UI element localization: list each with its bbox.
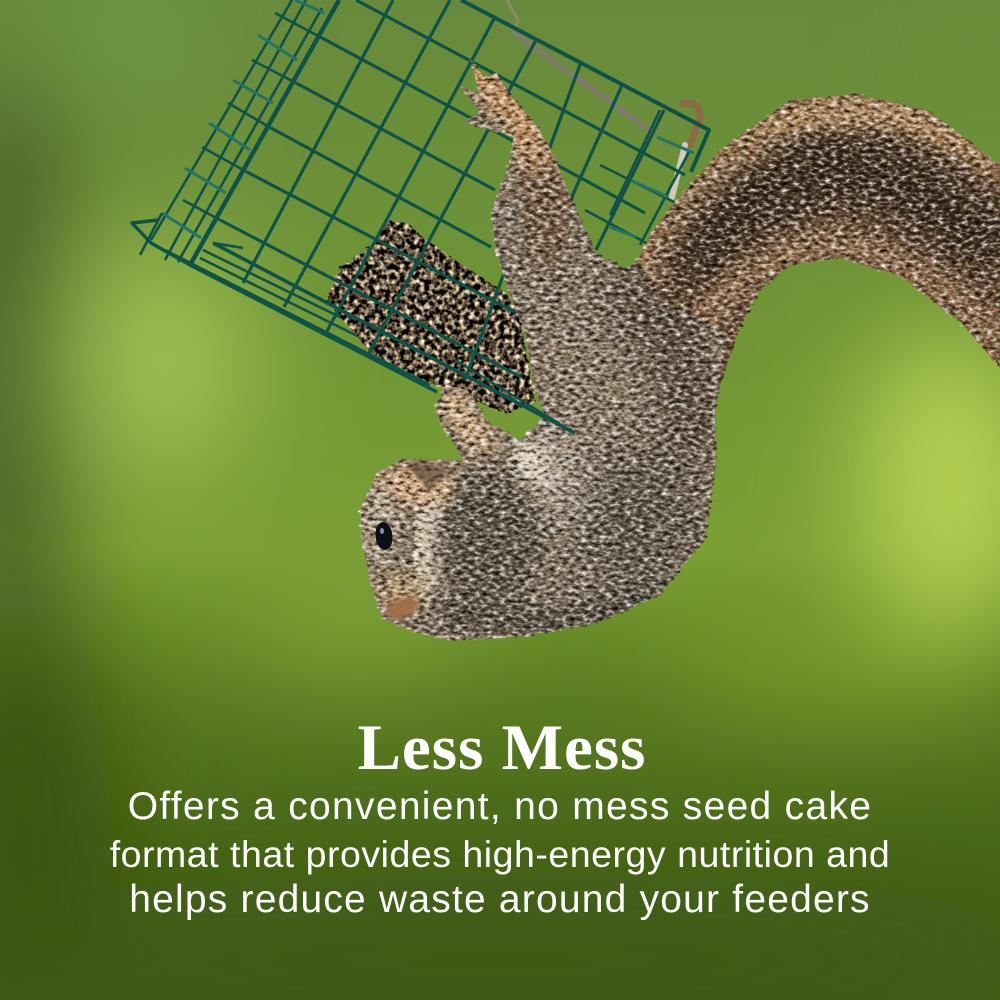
chain and hanger: [507, 0, 700, 197]
seed cake: [326, 220, 536, 413]
front wire grid: [220, 0, 685, 380]
title: Less Mess: [358, 712, 646, 784]
description text: Offers a convenient, no mess seed cake: [128, 785, 872, 828]
nose: [408, 462, 450, 492]
description text: [110, 785, 890, 921]
eye: [374, 521, 394, 551]
teal cross bars: [162, 0, 694, 238]
bird feeder cage with seed cake: [132, 0, 709, 413]
body, head, arms: [358, 58, 726, 642]
headline and description: [110, 712, 890, 921]
description text: format that provides high-energy nutrition and: [110, 832, 890, 874]
description text: helps reduce waste around your feeders: [129, 878, 871, 921]
ear: [383, 593, 421, 623]
tail: [635, 93, 1000, 401]
back wires of cage: [151, 0, 690, 385]
squirrel: [340, 40, 1000, 660]
cage frame edges: [132, 0, 709, 392]
front rail of cage: [213, 243, 575, 433]
